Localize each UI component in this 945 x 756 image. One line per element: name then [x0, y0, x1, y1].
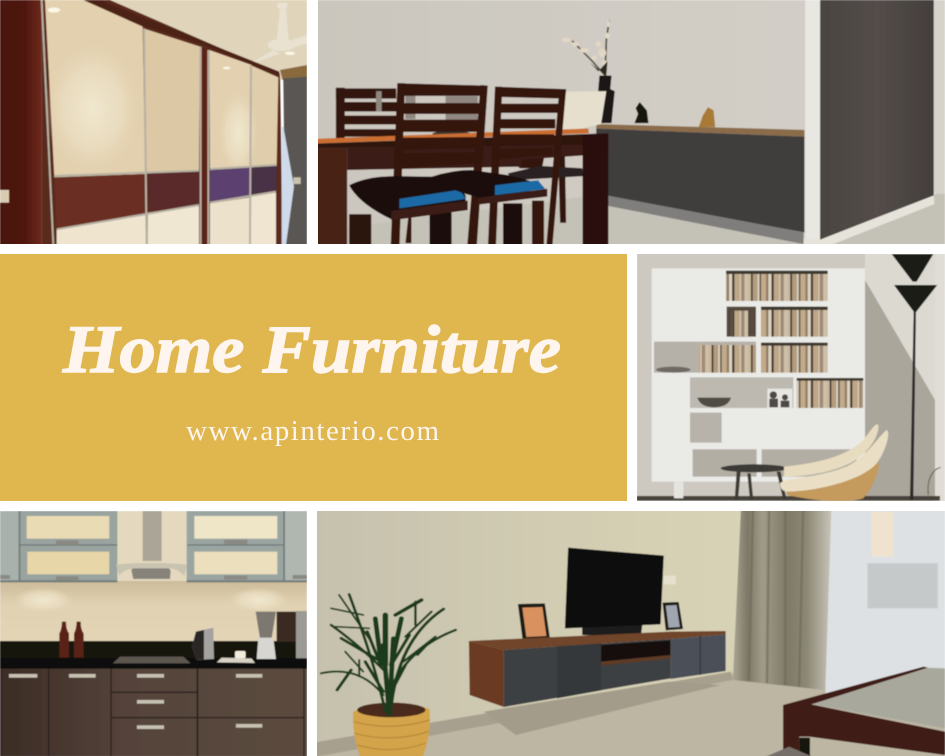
- picture frame left: [518, 603, 550, 641]
- middle seat blue cushion: [399, 190, 466, 208]
- open niche: [601, 640, 671, 666]
- pillar: [805, 0, 820, 242]
- cabinet side: [469, 641, 504, 707]
- glass door left bottom: [27, 552, 109, 574]
- flower stems: [572, 20, 609, 75]
- cabinet handles: [0, 540, 307, 580]
- drawer handles: [9, 674, 262, 729]
- sideboard top: [596, 124, 804, 137]
- hob: [113, 657, 191, 663]
- wall: [315, 0, 813, 252]
- wall upper: [0, 511, 307, 584]
- plate: [432, 131, 471, 137]
- cabinet end left: [0, 511, 19, 581]
- sheer curtain: [825, 510, 945, 697]
- floor lamp pole: [910, 312, 916, 500]
- curtain folds: [749, 510, 803, 687]
- compartment 7 shadow: [797, 378, 863, 381]
- curtain tie: [293, 177, 301, 184]
- compartment 7 books: [797, 378, 863, 408]
- floor: [390, 193, 945, 244]
- right seat blue cushion: [495, 180, 545, 195]
- compartment 4 shadow: [698, 342, 756, 345]
- white chair: [560, 91, 606, 133]
- blender base: [257, 638, 276, 659]
- upper cabinets left: [0, 511, 117, 582]
- accent band 4: [251, 166, 277, 194]
- cup: [235, 651, 246, 658]
- backsplash: [0, 581, 307, 642]
- glass door left top: [27, 516, 109, 539]
- pot soil: [357, 703, 425, 717]
- middle seat: [349, 176, 466, 219]
- table items: [376, 91, 478, 120]
- table leg left: [317, 148, 347, 250]
- lounge chair back: [784, 424, 878, 477]
- glass door right bottom: [194, 552, 277, 574]
- accent band 2: [147, 171, 199, 211]
- glass door upper 3: [209, 50, 252, 170]
- hood canopy: [131, 563, 171, 579]
- upper cabinets right: [187, 511, 307, 582]
- right seat frame: [478, 189, 547, 205]
- photo: sliding wardrobe: [0, 0, 307, 245]
- appliance silver: [296, 611, 307, 658]
- ganesha figurine: [699, 107, 715, 127]
- window strip: [282, 127, 295, 245]
- lit wall: [865, 253, 935, 400]
- light switch: [0, 190, 9, 203]
- table top: [317, 133, 608, 148]
- window glow: [871, 512, 894, 557]
- cabinet top: [469, 631, 726, 650]
- ceiling lights: [48, 7, 60, 13]
- skirting: [315, 672, 733, 756]
- hood chimney: [143, 511, 162, 561]
- window rails: [867, 563, 938, 608]
- plant pot: [353, 703, 430, 756]
- tv stand: [582, 623, 642, 636]
- glass door upper 2: [143, 28, 200, 173]
- shadow wall: [865, 280, 935, 498]
- shelf unit: [652, 268, 865, 482]
- wall: [315, 510, 741, 750]
- cabinet end right: [284, 511, 307, 581]
- compartment 9: [693, 449, 757, 477]
- kettle: [192, 628, 214, 660]
- compartment 10: [762, 449, 857, 477]
- kettle dark side: [192, 630, 204, 660]
- door divider lines: [0, 511, 307, 582]
- back seat: [508, 166, 583, 180]
- compartment 2 volumes: [732, 311, 748, 337]
- curtain: [283, 77, 307, 245]
- door reflection: [223, 67, 230, 69]
- leaves: [590, 61, 608, 75]
- floor: [637, 496, 940, 501]
- compartment 6 open shelf: [690, 377, 793, 408]
- dark wall panel: [820, 0, 934, 240]
- compartment 2 books: [727, 307, 756, 337]
- back dark chair: [336, 88, 566, 223]
- power cable: [928, 467, 941, 495]
- horse figurine: [634, 102, 648, 123]
- rug: [765, 747, 813, 756]
- under-cabinet light left: [13, 587, 73, 613]
- lounge chair seat: [780, 430, 888, 492]
- lamp cone lower: [894, 285, 937, 313]
- appliance: [277, 612, 297, 642]
- skirting: [802, 196, 935, 249]
- cabinet gaps: [48, 669, 305, 756]
- door panel middle: [557, 643, 601, 698]
- ceiling light right: [285, 52, 295, 55]
- title banner: [0, 254, 627, 501]
- cabinet shadow: [484, 682, 721, 735]
- saucer and cup: [217, 658, 255, 663]
- middle seat frame: [391, 201, 468, 220]
- far right wall: [934, 0, 945, 194]
- ceiling fan: [253, 3, 307, 62]
- cabinet doors: [504, 639, 671, 707]
- compartment 3 shadow: [761, 307, 828, 310]
- centre column: [201, 47, 208, 245]
- picture right inner: [666, 605, 680, 628]
- picture left inner: [522, 607, 546, 637]
- photo frames: [767, 389, 792, 408]
- blender jar: [256, 612, 276, 638]
- accent band 1: [54, 174, 146, 228]
- silver tray: [656, 367, 691, 373]
- lamp cone top: [892, 254, 933, 282]
- niche wood: [601, 655, 671, 666]
- ceiling: [42, 0, 307, 81]
- sideboard body: [596, 129, 804, 233]
- coffee table glass: [809, 668, 945, 728]
- coffee table frame: [783, 667, 945, 756]
- compartment 1 shadow: [726, 271, 828, 274]
- lower glass mid: [148, 206, 199, 245]
- ceiling beam: [83, 0, 279, 76]
- wall: [637, 253, 945, 502]
- photo: tv unit living room: [315, 510, 945, 756]
- title text: Home Furniture: [62, 311, 561, 387]
- runner: [317, 129, 589, 143]
- counter backsplash dark: [0, 641, 307, 659]
- website text: www.apinterio.com: [186, 415, 439, 447]
- front seat left stool: [349, 214, 371, 250]
- door seam: [700, 636, 701, 675]
- wardrobe frame: [42, 0, 283, 245]
- vase: [598, 75, 615, 123]
- palm plant: [321, 594, 456, 715]
- side table: [721, 464, 787, 500]
- sideboard plinth: [608, 196, 804, 244]
- photo: dining room: [315, 0, 945, 252]
- lower cabinets: [0, 669, 307, 756]
- glass door upper 1: [45, 0, 145, 177]
- shelf foot: [674, 482, 683, 498]
- silver door frames: [42, 0, 277, 245]
- compartment 8: [690, 413, 722, 443]
- compartment 3 books: [761, 307, 828, 337]
- picture frame right: [663, 602, 683, 630]
- under-cabinet light right: [228, 587, 288, 613]
- glass door upper 4: [251, 66, 278, 167]
- bowl: [697, 398, 731, 407]
- table leg right: [583, 134, 608, 246]
- floor: [315, 673, 945, 756]
- pot ribs: [354, 720, 430, 750]
- table apron: [347, 144, 608, 170]
- blossoms: [561, 20, 610, 66]
- countertop: [0, 658, 307, 669]
- lounge chair basket: [787, 463, 879, 501]
- compartment 5 books: [761, 343, 828, 373]
- television: [565, 548, 664, 628]
- photo: kitchen: [0, 511, 307, 756]
- right wall strip: [935, 253, 945, 502]
- right seat: [432, 170, 544, 201]
- wood column: [0, 0, 42, 245]
- curtain: [733, 510, 831, 690]
- accent band 3: [210, 168, 250, 202]
- hood glass: [116, 563, 187, 576]
- middle chair: [391, 83, 488, 250]
- glass door right top: [194, 516, 277, 539]
- photo: white bookshelf: [637, 253, 945, 502]
- cabinet doors right: [671, 634, 726, 679]
- compartment 4 empty: [654, 342, 698, 373]
- compartment 1 books: [726, 272, 828, 301]
- coffee table gap: [799, 738, 810, 756]
- light spot left: [48, 59, 128, 158]
- bottles: [59, 622, 84, 658]
- lower glass left: [57, 215, 147, 245]
- light spot right: [224, 102, 254, 164]
- photo figures: [769, 391, 789, 407]
- compartment 5 shadow: [761, 343, 828, 346]
- curtain pelmet: [280, 65, 307, 80]
- lower glass right: [210, 197, 250, 245]
- banner background: [0, 254, 627, 501]
- compartment 4 books: [698, 343, 756, 373]
- lower glass far right: [251, 193, 276, 245]
- right chair: [488, 87, 566, 250]
- wall socket: [664, 576, 676, 584]
